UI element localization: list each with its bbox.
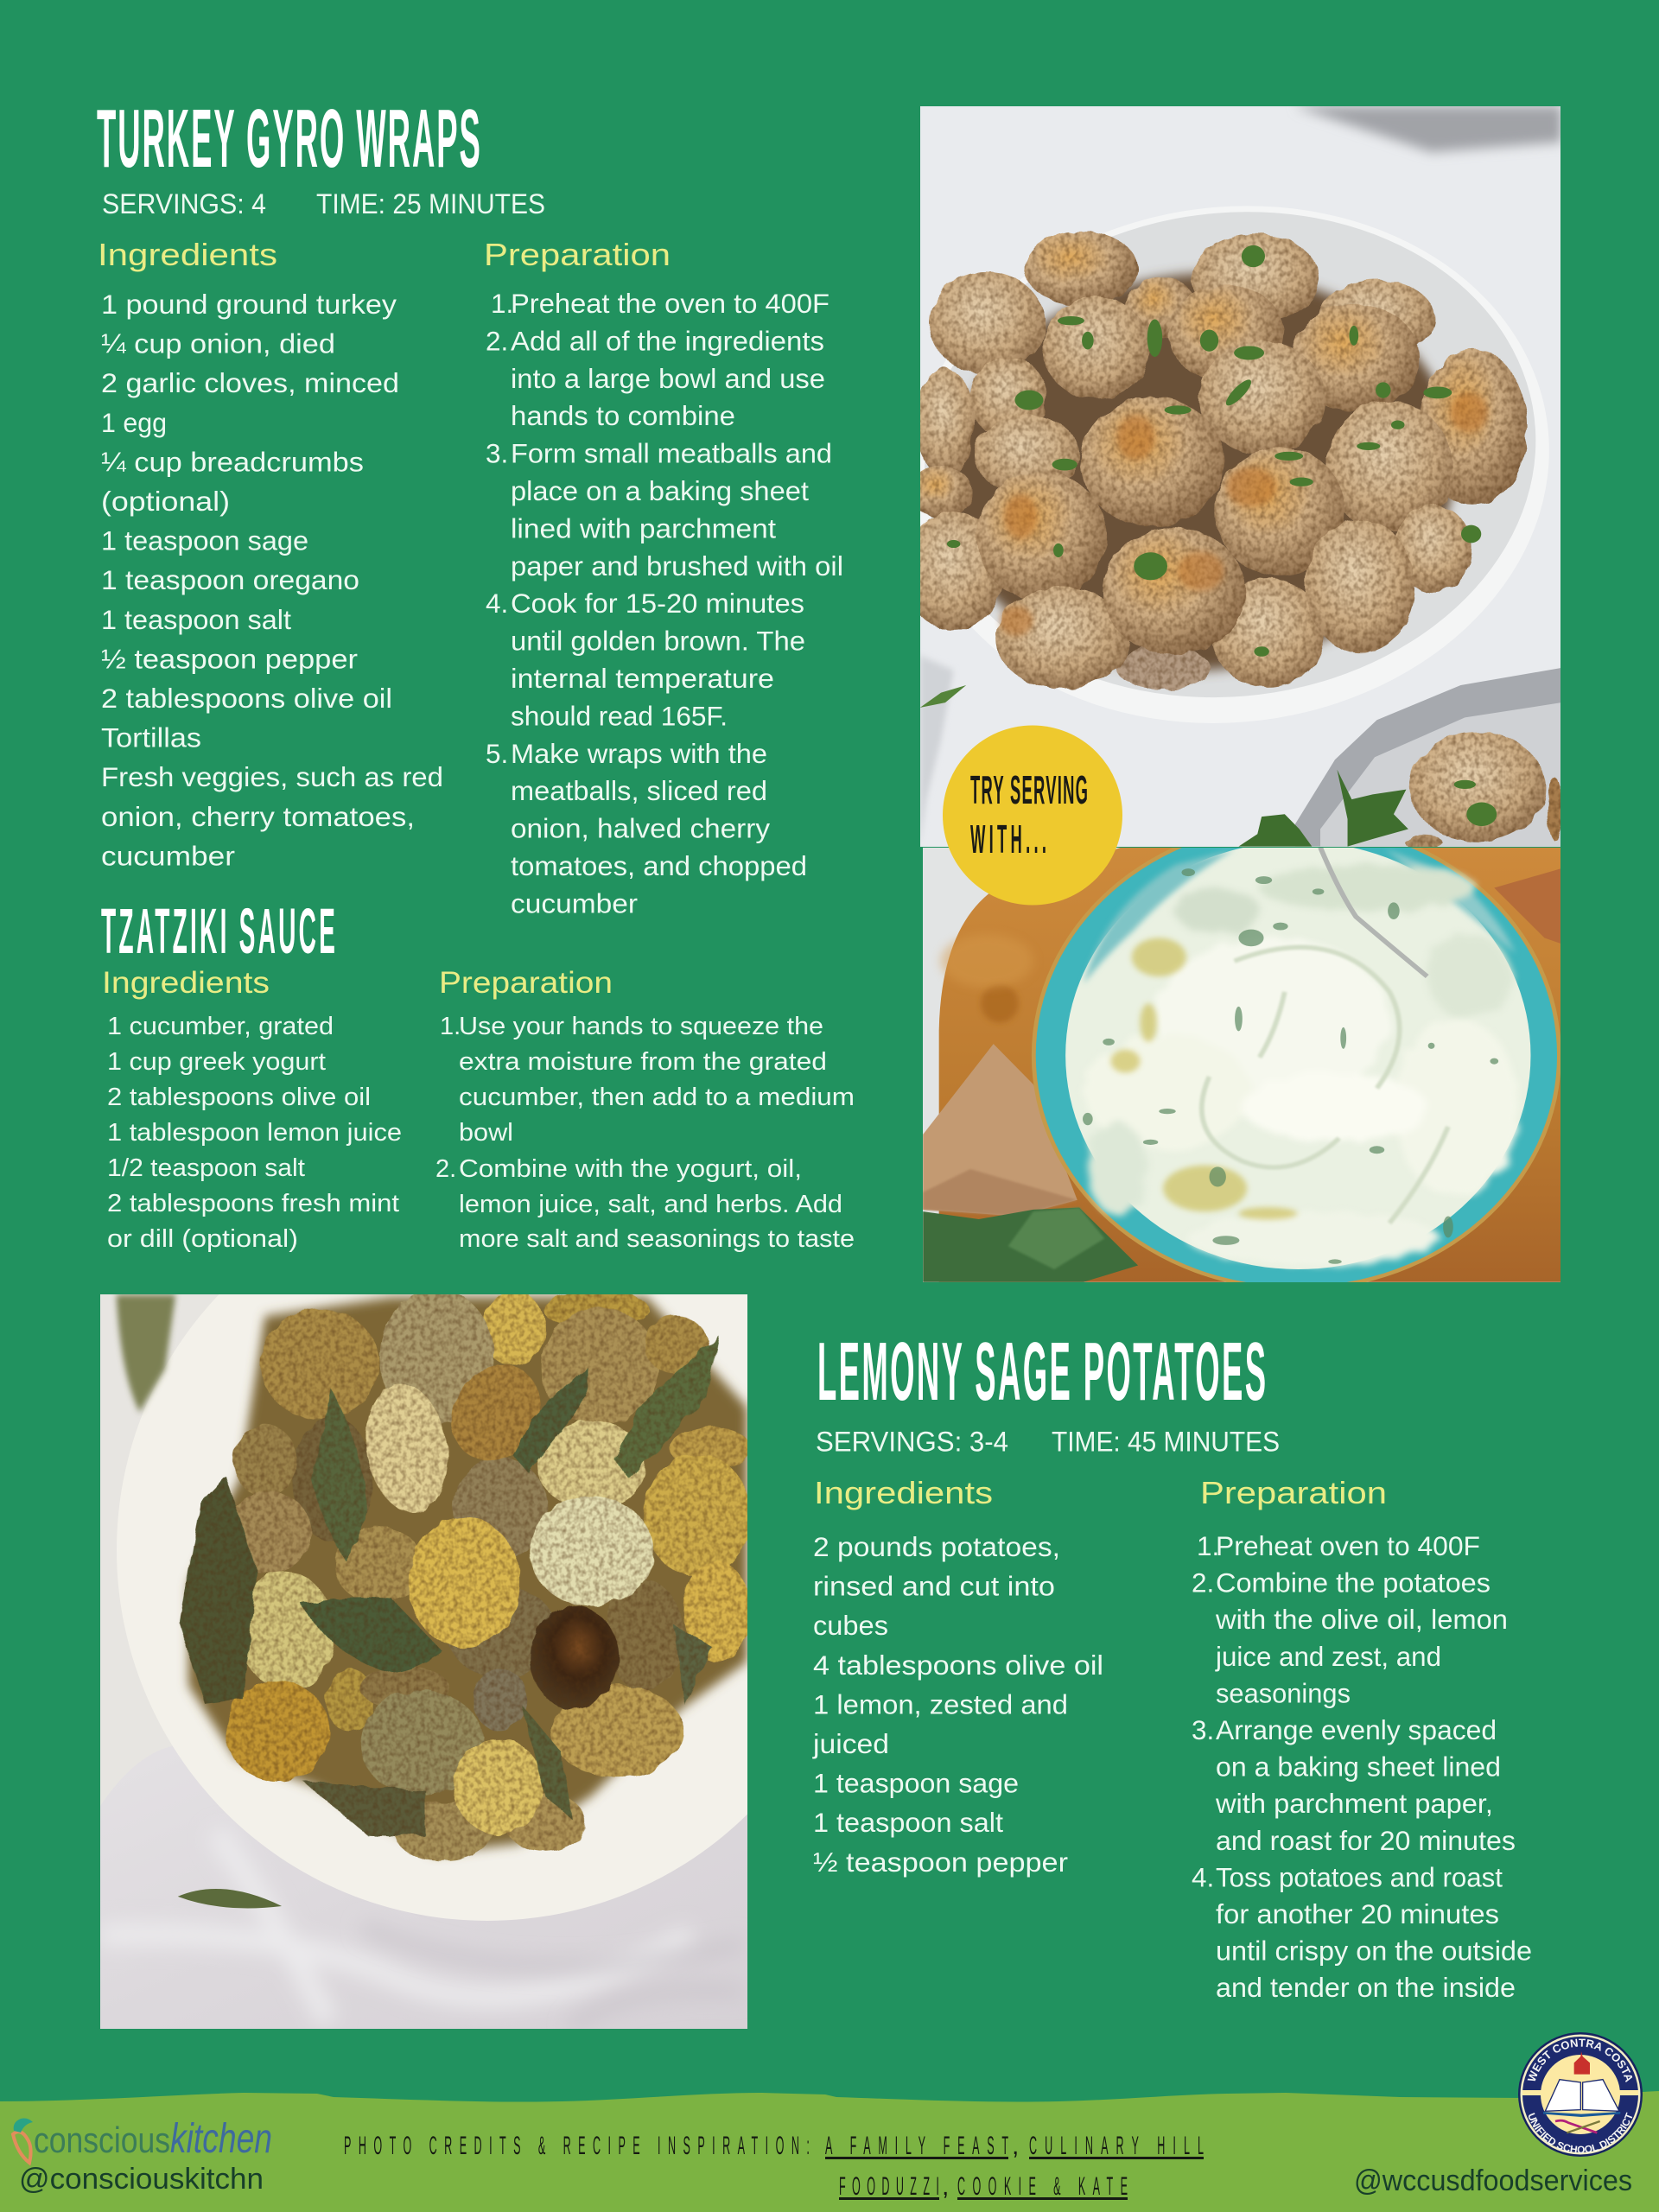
potato preparation steps: Toss potatoes and roast: [1216, 1861, 1503, 1892]
potato preparation steps: Combine the potatoes: [1216, 1567, 1491, 1599]
potato ingredients list: 4 tablespoons olive oil: [813, 1649, 1103, 1681]
callout: try serving with: WITH...: [970, 817, 1046, 862]
potato ingredients list: 1 teaspoon sage: [813, 1768, 1019, 1799]
heading: tzatziki preparation: Preparation: [439, 966, 613, 1000]
potato preparation steps: 1.: [1197, 1530, 1219, 1561]
bowl rim: [1032, 820, 1561, 1291]
potato ingredients list: [812, 1531, 1103, 1878]
potato ingredients list: 1 lemon, zested and: [813, 1688, 1068, 1719]
photo: tzatziki in a turquoise bowl: [923, 820, 1561, 1291]
potato preparation steps: with parchment paper,: [1215, 1788, 1493, 1819]
tzatziki preparation steps: bowl: [459, 1119, 513, 1147]
logo: conscious kitchen: conscious: [34, 2120, 170, 2160]
recipe: turkey gyro wraps: [97, 92, 843, 918]
preparation steps: hands to combine: [511, 400, 735, 431]
ingredients list: cucumber: [101, 840, 235, 871]
potato ingredients list: 2 pounds potatoes,: [813, 1531, 1060, 1562]
icon: carrot: [13, 2119, 33, 2163]
photo credits: COOKIE & KATE: [957, 2171, 1128, 2201]
preparation steps: paper and brushed with oil: [511, 550, 843, 582]
ingredients list: onion, cherry tomatoes,: [101, 801, 415, 832]
potato preparation steps: and roast for 20 minutes: [1216, 1825, 1516, 1856]
photo credits: A FAMILY FEAST: [825, 2131, 1008, 2160]
handle: wccusdfoodservices: @wccusdfoodservices: [1354, 2164, 1632, 2197]
preparation steps: Make wraps with the: [511, 738, 767, 769]
servings and time: TIME: 25 MINUTES: [316, 188, 545, 219]
preparation steps: [486, 288, 843, 918]
pile shadow: [188, 1297, 747, 1853]
potato preparation steps: juice and zest, and: [1215, 1641, 1441, 1672]
mint leaves: [923, 1208, 1138, 1282]
tzatziki preparation steps: cucumber, then add to a medium: [459, 1084, 855, 1111]
preparation steps: onion, halved cherry: [511, 813, 770, 844]
potato servings and time: [816, 1426, 1280, 1457]
bowl: [117, 1294, 747, 1921]
preparation steps: Form small meatballs and: [511, 438, 832, 469]
heading: preparation: Preparation: [484, 237, 671, 272]
badge: west contra costa unified school district: WEST CONTRA COSTA: [1528, 2039, 1633, 2082]
heading: potato ingredients: Ingredients: [814, 1475, 993, 1510]
logo: conscious kitchen: [13, 2116, 272, 2163]
ingredients list: ¼ cup breadcrumbs: [101, 446, 364, 477]
potato preparation steps: with the olive oil, lemon: [1215, 1604, 1508, 1635]
preparation steps: meatballs, sliced red: [511, 775, 767, 806]
potato preparation steps: until crispy on the outside: [1216, 1936, 1532, 1967]
title: lemony sage potatoes: LEMONY SAGE POTATOES: [817, 1325, 1266, 1418]
preparation steps: lined with parchment: [511, 512, 776, 543]
potato preparation steps: 2.: [1192, 1567, 1214, 1599]
pita wedge left: [923, 1044, 1077, 1216]
icon: pen and pencil: [1555, 2120, 1600, 2133]
ingredients list: ¼ cup onion, died: [101, 328, 335, 359]
icon: schoolhouse: [1574, 2051, 1590, 2075]
icon: open book: [1543, 2080, 1620, 2117]
sage leaves: [311, 1389, 366, 1560]
photo: roasted potatoes with sage: [100, 1294, 747, 2029]
badge: west contra costa unified school district: [1518, 2032, 1643, 2157]
potato ingredients list: juiced: [812, 1728, 889, 1759]
towel: [100, 1815, 747, 2029]
photo credits: PHOTO CREDITS & RECIPE INSPIRATION:: [344, 2131, 810, 2160]
callout: try serving with: TRY SERVING: [970, 768, 1088, 813]
photo: turkey meatballs in a white bowl: [896, 106, 1564, 849]
potato preparation steps: 4.: [1192, 1861, 1214, 1892]
tzatziki preparation steps: [435, 1013, 855, 1253]
potato preparation steps: on a baking sheet lined: [1216, 1751, 1501, 1783]
recipe: tzatziki sauce: [101, 895, 855, 1253]
badge: west contra costa unified school district: UNIFIED SCHOOL DISTRICT: [1529, 2112, 1633, 2153]
preparation steps: into a large bowl and use: [511, 363, 825, 394]
preparation steps: Preheat the oven to 400F: [511, 288, 830, 319]
tzatziki preparation steps: 2.: [435, 1155, 456, 1183]
ingredients list: 1 teaspoon sage: [101, 525, 308, 556]
photo credits: ,: [1012, 2132, 1019, 2160]
preparation steps: cucumber: [511, 887, 638, 918]
tzatziki ingredients list: 2 tablespoons fresh mint: [107, 1190, 399, 1217]
ingredients list: Fresh veggies, such as red: [101, 761, 443, 792]
tzatziki ingredients list: or dill (optional): [107, 1225, 298, 1253]
ingredients list: 2 tablespoons olive oil: [101, 683, 392, 714]
potato preparation steps: 3.: [1192, 1714, 1214, 1745]
callout: try serving with: [943, 726, 1122, 906]
title: tzatziki sauce: TZATZIKI SAUCE: [101, 895, 335, 967]
tzatziki preparation steps: Combine with the yogurt, oil,: [459, 1155, 802, 1183]
heading: ingredients: Ingredients: [98, 237, 277, 272]
potato ingredients list: cubes: [813, 1610, 888, 1641]
potato ingredients list: ½ teaspoon pepper: [813, 1847, 1068, 1878]
preparation steps: Cook for 15-20 minutes: [511, 588, 804, 619]
tzatziki preparation steps: lemon juice, salt, and herbs. Add: [459, 1191, 842, 1218]
ingredients list: (optional): [101, 486, 230, 517]
ingredients list: 2 garlic cloves, minced: [101, 367, 399, 398]
browned spots: [1000, 392, 1488, 636]
swirls: [1202, 947, 1448, 1223]
pita wedge right: [1494, 868, 1561, 944]
servings and time: SERVINGS: 4: [102, 188, 266, 219]
tzatziki ingredients list: 1 cucumber, grated: [107, 1013, 334, 1040]
potato preparation steps: Preheat oven to 400F: [1216, 1530, 1480, 1561]
tzatziki ingredients list: [107, 1013, 402, 1253]
ingredients list: 1 pound ground turkey: [101, 289, 397, 320]
handle: consciouskitchn: @consciouskitchn: [19, 2163, 264, 2196]
wooden board: [939, 848, 1561, 1282]
photo credits: [344, 2131, 1204, 2201]
tzatziki ingredients list: 2 tablespoons olive oil: [107, 1084, 371, 1111]
potato preparation steps: [1192, 1530, 1532, 2003]
potato servings and time: SERVINGS: 3-4: [816, 1426, 1008, 1457]
ingredients list: 1 teaspoon oregano: [101, 564, 359, 595]
heading: tzatziki ingredients: Ingredients: [102, 966, 270, 1000]
tzatziki preparation steps: 1.: [440, 1013, 461, 1040]
title: turkey gyro wraps: TURKEY GYRO WRAPS: [97, 92, 480, 185]
potato ingredients list: 1 teaspoon salt: [813, 1807, 1003, 1838]
tzatziki ingredients list: 1 tablespoon lemon juice: [107, 1119, 402, 1147]
tzatziki ingredients list: 1 cup greek yogurt: [107, 1048, 326, 1076]
preparation steps: 2.: [486, 325, 508, 356]
preparation steps: should read 165F.: [511, 700, 728, 731]
potato preparation steps: seasonings: [1216, 1677, 1351, 1708]
preparation steps: Add all of the ingredients: [511, 325, 824, 356]
preparation steps: place on a baking sheet: [511, 475, 809, 506]
photo credits: CULINARY HILL: [1029, 2131, 1204, 2160]
photo credits: FOODUZZI: [839, 2171, 939, 2201]
recipe: lemony sage potatoes: [812, 1325, 1532, 2003]
preparation steps: internal temperature: [511, 663, 774, 694]
heading: potato preparation: Preparation: [1200, 1475, 1387, 1510]
ingredients list: ½ teaspoon pepper: [101, 643, 358, 674]
tzatziki preparation steps: extra moisture from the grated: [459, 1048, 827, 1076]
ingredients list: Tortillas: [101, 722, 201, 753]
photo credits: ,: [942, 2172, 949, 2201]
ingredients list: 1 teaspoon salt: [101, 604, 291, 635]
potato ingredients list: rinsed and cut into: [813, 1571, 1055, 1602]
tzatziki ingredients list: 1/2 teaspoon salt: [107, 1154, 305, 1182]
potato preparation steps: Arrange evenly spaced: [1216, 1714, 1497, 1745]
servings and time: [102, 188, 545, 219]
preparation steps: 1.: [491, 288, 513, 319]
tzatziki preparation steps: more salt and seasonings to taste: [459, 1225, 855, 1253]
logo: conscious kitchen: kitchen: [170, 2116, 272, 2162]
preparation steps: 3.: [486, 438, 508, 469]
potato preparation steps: and tender on the inside: [1216, 1972, 1516, 2003]
tzatziki preparation steps: Use your hands to squeeze the: [459, 1013, 823, 1040]
potato servings and time: TIME: 45 MINUTES: [1052, 1426, 1280, 1457]
preparation steps: 4.: [486, 588, 508, 619]
preparation steps: 5.: [486, 738, 508, 769]
ingredients list: [101, 289, 443, 871]
preparation steps: until golden brown. The: [511, 626, 805, 657]
preparation steps: tomatoes, and chopped: [511, 850, 807, 881]
potato preparation steps: for another 20 minutes: [1216, 1898, 1499, 1929]
footer band: [0, 2091, 1659, 2212]
ingredients list: 1 egg: [101, 407, 167, 438]
